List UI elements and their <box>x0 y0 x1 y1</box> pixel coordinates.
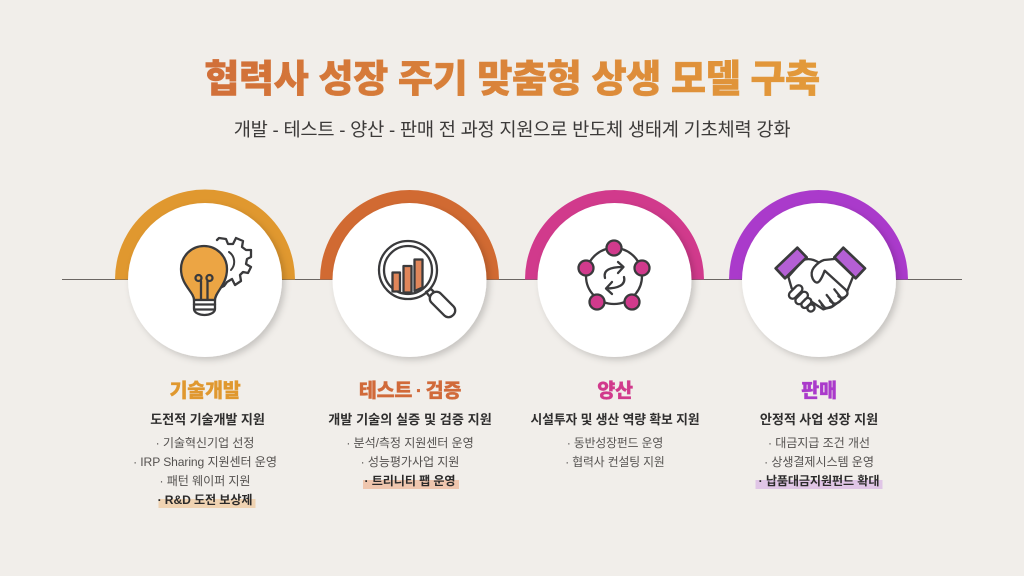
stage 1 text: · 패턴 웨이퍼 지원 <box>160 474 250 488</box>
stage 2 arc and circle <box>320 190 499 357</box>
icon: handshake <box>776 248 865 313</box>
stage 3 arc and circle <box>525 190 704 357</box>
subheading: 안정적 사업 성장 지원 <box>760 412 878 427</box>
heading: 판매: 판매 <box>801 380 837 402</box>
icon: magnifier with bar chart <box>379 241 458 320</box>
stage 2 text <box>328 380 492 489</box>
stage 3 text <box>530 380 700 469</box>
stage 1 text <box>133 380 277 508</box>
title: 협력사 성장 주기 맞춤형 상생 모델 구축 <box>204 58 820 101</box>
heading: 테스트·검증: 테스트 · 검증 <box>359 380 461 402</box>
stage 4 text <box>756 380 882 489</box>
highlighted item: · 납품대금지원펀드 확대 <box>759 474 879 488</box>
stage 4 text: · 대금지급 조건 개선 <box>768 436 870 450</box>
stage 4 text: · 상생결제시스템 운영 <box>764 455 874 469</box>
stage 2 text: · 분석/측정 지원센터 운영 <box>346 436 474 450</box>
stage 3 text: · 동반성장펀드 운영 <box>567 436 663 450</box>
stage 3 text: · 협력사 컨설팅 지원 <box>565 455 665 469</box>
heading: 양산: 양산 <box>597 380 633 402</box>
subheading: 시설투자 및 생산 역량 확보 지원 <box>530 412 700 427</box>
heading: 기술개발: 기술개발 <box>170 380 240 402</box>
stage 2 text: · 성능평가사업 지원 <box>361 455 459 469</box>
stage 1 text: · 기술혁신기업 선정 <box>156 436 254 450</box>
highlighted item: · R&D 도전 보상제 <box>158 493 252 507</box>
stage 1 text: · IRP Sharing 지원센터 운영 <box>133 455 277 469</box>
icon: light bulb and gear <box>181 238 251 315</box>
stage 4 arc and circle <box>729 190 908 357</box>
subtitle: 개발 - 테스트 - 양산 - 판매 전 과정 지원으로 반도체 생태계 기초체력 강화 <box>234 119 790 140</box>
subheading: 개발 기술의 실증 및 검증 지원 <box>328 412 492 427</box>
icon: network cycle <box>578 240 650 310</box>
subheading: 도전적 기술개발 지원 <box>150 412 265 427</box>
stage 1 arc and circle <box>115 190 295 357</box>
highlighted item: · 트리니티 팹 운영 <box>365 474 455 488</box>
